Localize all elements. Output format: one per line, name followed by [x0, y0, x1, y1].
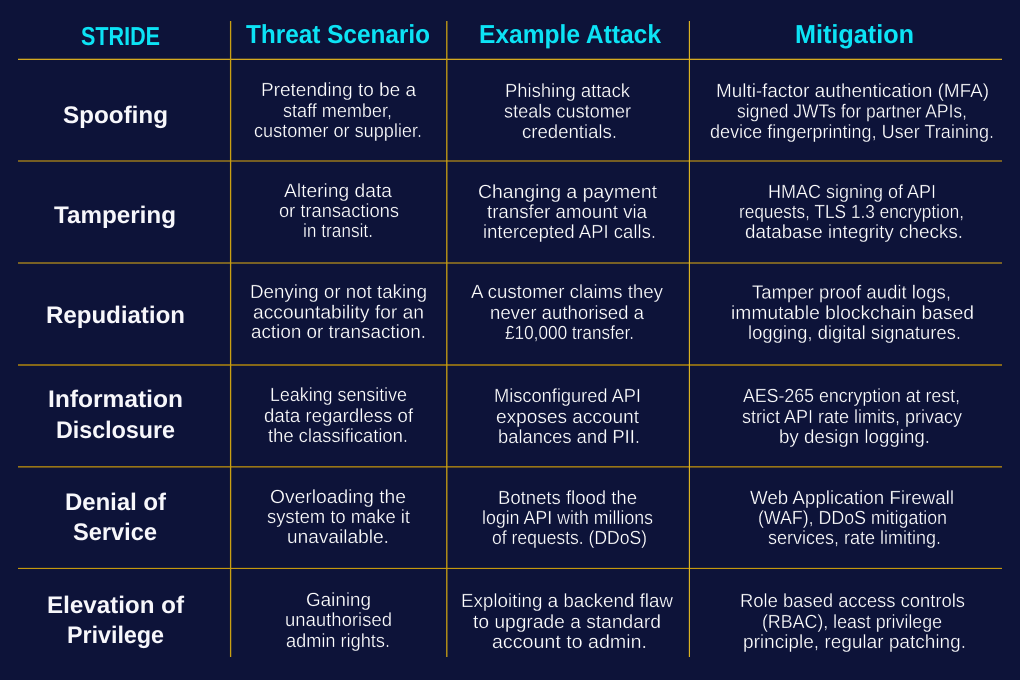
- threat scenario: Denial of Service: unavailable.: [287, 527, 389, 548]
- mitigation: Elevation of Privilege: (RBAC), least privilege: [762, 612, 942, 633]
- mitigation: Repudiation: immutable blockchain based: [731, 303, 974, 324]
- heading: Example Attack: Example Attack: [479, 19, 661, 49]
- example attack: Spoofing: Phishing attack: [505, 81, 630, 102]
- example attack: Information Disclosure: Misconfigured API: [494, 386, 641, 407]
- threat scenario: Information Disclosure: [264, 385, 414, 447]
- threat scenario: Tampering: or transactions: [279, 201, 399, 222]
- threat scenario: Tampering: in transit.: [303, 221, 373, 242]
- label: Elevation of Privilege: Elevation of: [47, 592, 185, 619]
- mitigation: Spoofing: [710, 81, 994, 143]
- mitigation: Repudiation: [731, 282, 974, 344]
- label: Information Disclosure: Disclosure: [56, 417, 175, 444]
- example attack: Denial of Service: login API with millions: [482, 508, 653, 529]
- row: Denial of Service: [65, 487, 954, 549]
- threat scenario: Information Disclosure: the classification.: [268, 426, 408, 447]
- example attack: Elevation of Privilege: account to admin.: [492, 632, 647, 653]
- threat scenario: Spoofing: [254, 80, 422, 142]
- example attack: Tampering: transfer amount via: [487, 202, 647, 223]
- label: Repudiation: Repudiation: [46, 302, 185, 329]
- example attack: Spoofing: steals customer: [504, 102, 632, 122]
- label: Denial of Service: [65, 489, 167, 546]
- example attack: Spoofing: credentials.: [522, 122, 617, 143]
- example attack: Elevation of Privilege: Exploiting a backend flaw: [461, 591, 673, 612]
- label: Elevation of Privilege: Privilege: [67, 622, 164, 649]
- example attack: Spoofing: [504, 81, 632, 143]
- row: Repudiation: [46, 282, 974, 344]
- example attack: Repudiation: £10,000 transfer.: [505, 323, 634, 344]
- label: Spoofing: Spoofing: [63, 102, 168, 129]
- row: Tampering: [54, 181, 964, 243]
- threat scenario: Information Disclosure: data regardless of: [264, 406, 414, 427]
- mitigation: Denial of Service: services, rate limiting.: [768, 528, 941, 549]
- threat scenario: Denial of Service: [267, 487, 411, 548]
- example attack: Repudiation: never authorised a: [490, 303, 644, 324]
- heading: Mitigation: Mitigation: [795, 19, 914, 49]
- mitigation: Repudiation: Tamper proof audit logs,: [752, 282, 951, 304]
- threat scenario: Spoofing: staff member,: [283, 101, 392, 122]
- threat scenario: Elevation of Privilege: admin rights.: [286, 631, 390, 652]
- example attack: Denial of Service: [482, 488, 653, 549]
- threat scenario: Elevation of Privilege: Gaining: [306, 590, 371, 611]
- example attack: Information Disclosure: exposes account: [496, 407, 640, 428]
- example attack: Denial of Service: of requests. (DDoS): [492, 528, 647, 549]
- mitigation: Information Disclosure: AES-265 encryption at rest,: [743, 386, 960, 407]
- heading: STRIDE: STRIDE: [81, 21, 160, 51]
- label: Denial of Service: Denial of: [65, 489, 167, 516]
- mitigation: Denial of Service: Web Application Firewall: [750, 488, 954, 509]
- label: Elevation of Privilege: [47, 592, 185, 649]
- mitigation: Elevation of Privilege: principle, regular patching.: [743, 632, 966, 653]
- example attack: Repudiation: A customer claims they: [471, 282, 663, 303]
- row: Spoofing: [63, 80, 994, 143]
- label: Tampering: Tampering: [54, 202, 176, 229]
- mitigation: Elevation of Privilege: Role based access controls: [740, 591, 965, 612]
- example attack: Denial of Service: Botnets flood the: [498, 488, 637, 509]
- label: Information Disclosure: Information: [48, 386, 183, 413]
- mitigation: Tampering: database integrity checks.: [745, 222, 963, 243]
- mitigation: Elevation of Privilege: [740, 591, 966, 653]
- mitigation: Denial of Service: (WAF), DDoS mitigation: [758, 508, 947, 529]
- mitigation: Denial of Service: [750, 488, 954, 549]
- mitigation: Information Disclosure: [742, 386, 962, 448]
- mitigation: Tampering: [739, 182, 964, 243]
- label: Information Disclosure: [48, 386, 183, 444]
- mitigation: Tampering: requests, TLS 1.3 encryption,: [739, 202, 964, 223]
- row: Information Disclosure: [48, 385, 962, 448]
- threat scenario: Tampering: [279, 181, 399, 242]
- mitigation: Information Disclosure: strict API rate limits, privacy: [742, 407, 962, 428]
- heading: Threat Scenario: Threat Scenario: [246, 19, 430, 49]
- mitigation: Tampering: HMAC signing of API: [768, 182, 936, 203]
- example attack: Tampering: Changing a payment: [478, 182, 658, 203]
- example attack: Tampering: intercepted API calls.: [483, 222, 656, 243]
- threat scenario: Spoofing: Pretending to be a: [261, 80, 416, 101]
- mitigation: Spoofing: signed JWTs for partner APIs,: [737, 102, 967, 122]
- label: Denial of Service: Service: [73, 519, 157, 546]
- threat scenario: Elevation of Privilege: unauthorised: [285, 610, 392, 631]
- header row: [81, 19, 914, 51]
- example attack: Elevation of Privilege: to upgrade a standard: [473, 612, 661, 633]
- threat scenario: Denial of Service: Overloading the: [270, 487, 406, 508]
- mitigation: Spoofing: Multi-factor authentication (MFA): [716, 81, 989, 102]
- mitigation: Spoofing: device fingerprinting, User Training.: [710, 122, 994, 143]
- threat scenario: Information Disclosure: Leaking sensitive: [270, 385, 407, 406]
- row: Elevation of Privilege: [47, 590, 966, 653]
- threat scenario: Spoofing: customer or supplier.: [254, 121, 422, 142]
- mitigation: Information Disclosure: by design logging.: [779, 427, 930, 448]
- example attack: Repudiation: [471, 282, 663, 344]
- example attack: Elevation of Privilege: [461, 591, 673, 653]
- threat scenario: Repudiation: Denying or not taking: [250, 282, 427, 303]
- example attack: Tampering: [478, 182, 658, 243]
- example attack: Information Disclosure: balances and PII.: [498, 427, 640, 448]
- threat scenario: Tampering: Altering data: [284, 181, 392, 202]
- mitigation: Repudiation: logging, digital signatures.: [748, 323, 961, 344]
- threat scenario: Repudiation: accountability for an: [253, 302, 424, 324]
- threat scenario: Repudiation: [250, 282, 427, 343]
- threat scenario: Denial of Service: system to make it: [267, 507, 411, 528]
- example attack: Information Disclosure: [494, 386, 641, 448]
- threat scenario: Elevation of Privilege: [285, 590, 392, 652]
- threat scenario: Repudiation: action or transaction.: [251, 322, 426, 343]
